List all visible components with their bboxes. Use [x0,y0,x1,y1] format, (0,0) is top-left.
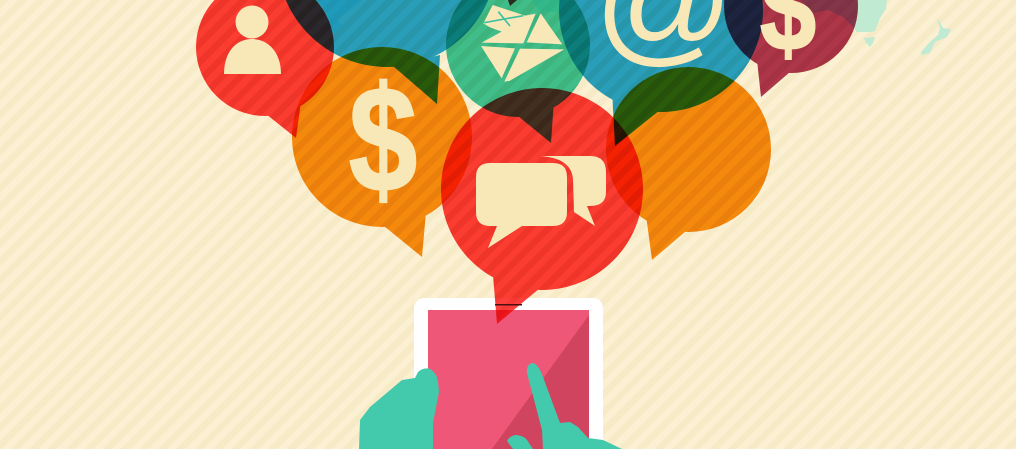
speech bubble: green mail [446,0,590,143]
tail shadow line [495,304,522,306]
speech bubble: person red [196,0,334,138]
screen shine [492,315,589,449]
icon: chat bubbles [476,156,606,248]
speech bubble: blue left [277,0,497,104]
speech bubble: blue at sign [559,0,763,146]
speech bubble: red chat [441,88,643,324]
icon: person [224,6,281,74]
speech bubble: orange dollar [292,47,472,257]
tablet screen [428,310,589,449]
tablet [414,298,603,449]
icon: dollar large: $ [349,56,417,224]
speech bubble: maroon dollar [724,0,858,97]
speech bubble: orange right [606,67,771,260]
world map fragments [318,0,951,55]
tablet frame [414,298,603,449]
left hand [359,368,439,449]
icon: envelope [481,5,564,82]
bubble tail tip at top [508,0,517,6]
right hand [507,363,622,449]
